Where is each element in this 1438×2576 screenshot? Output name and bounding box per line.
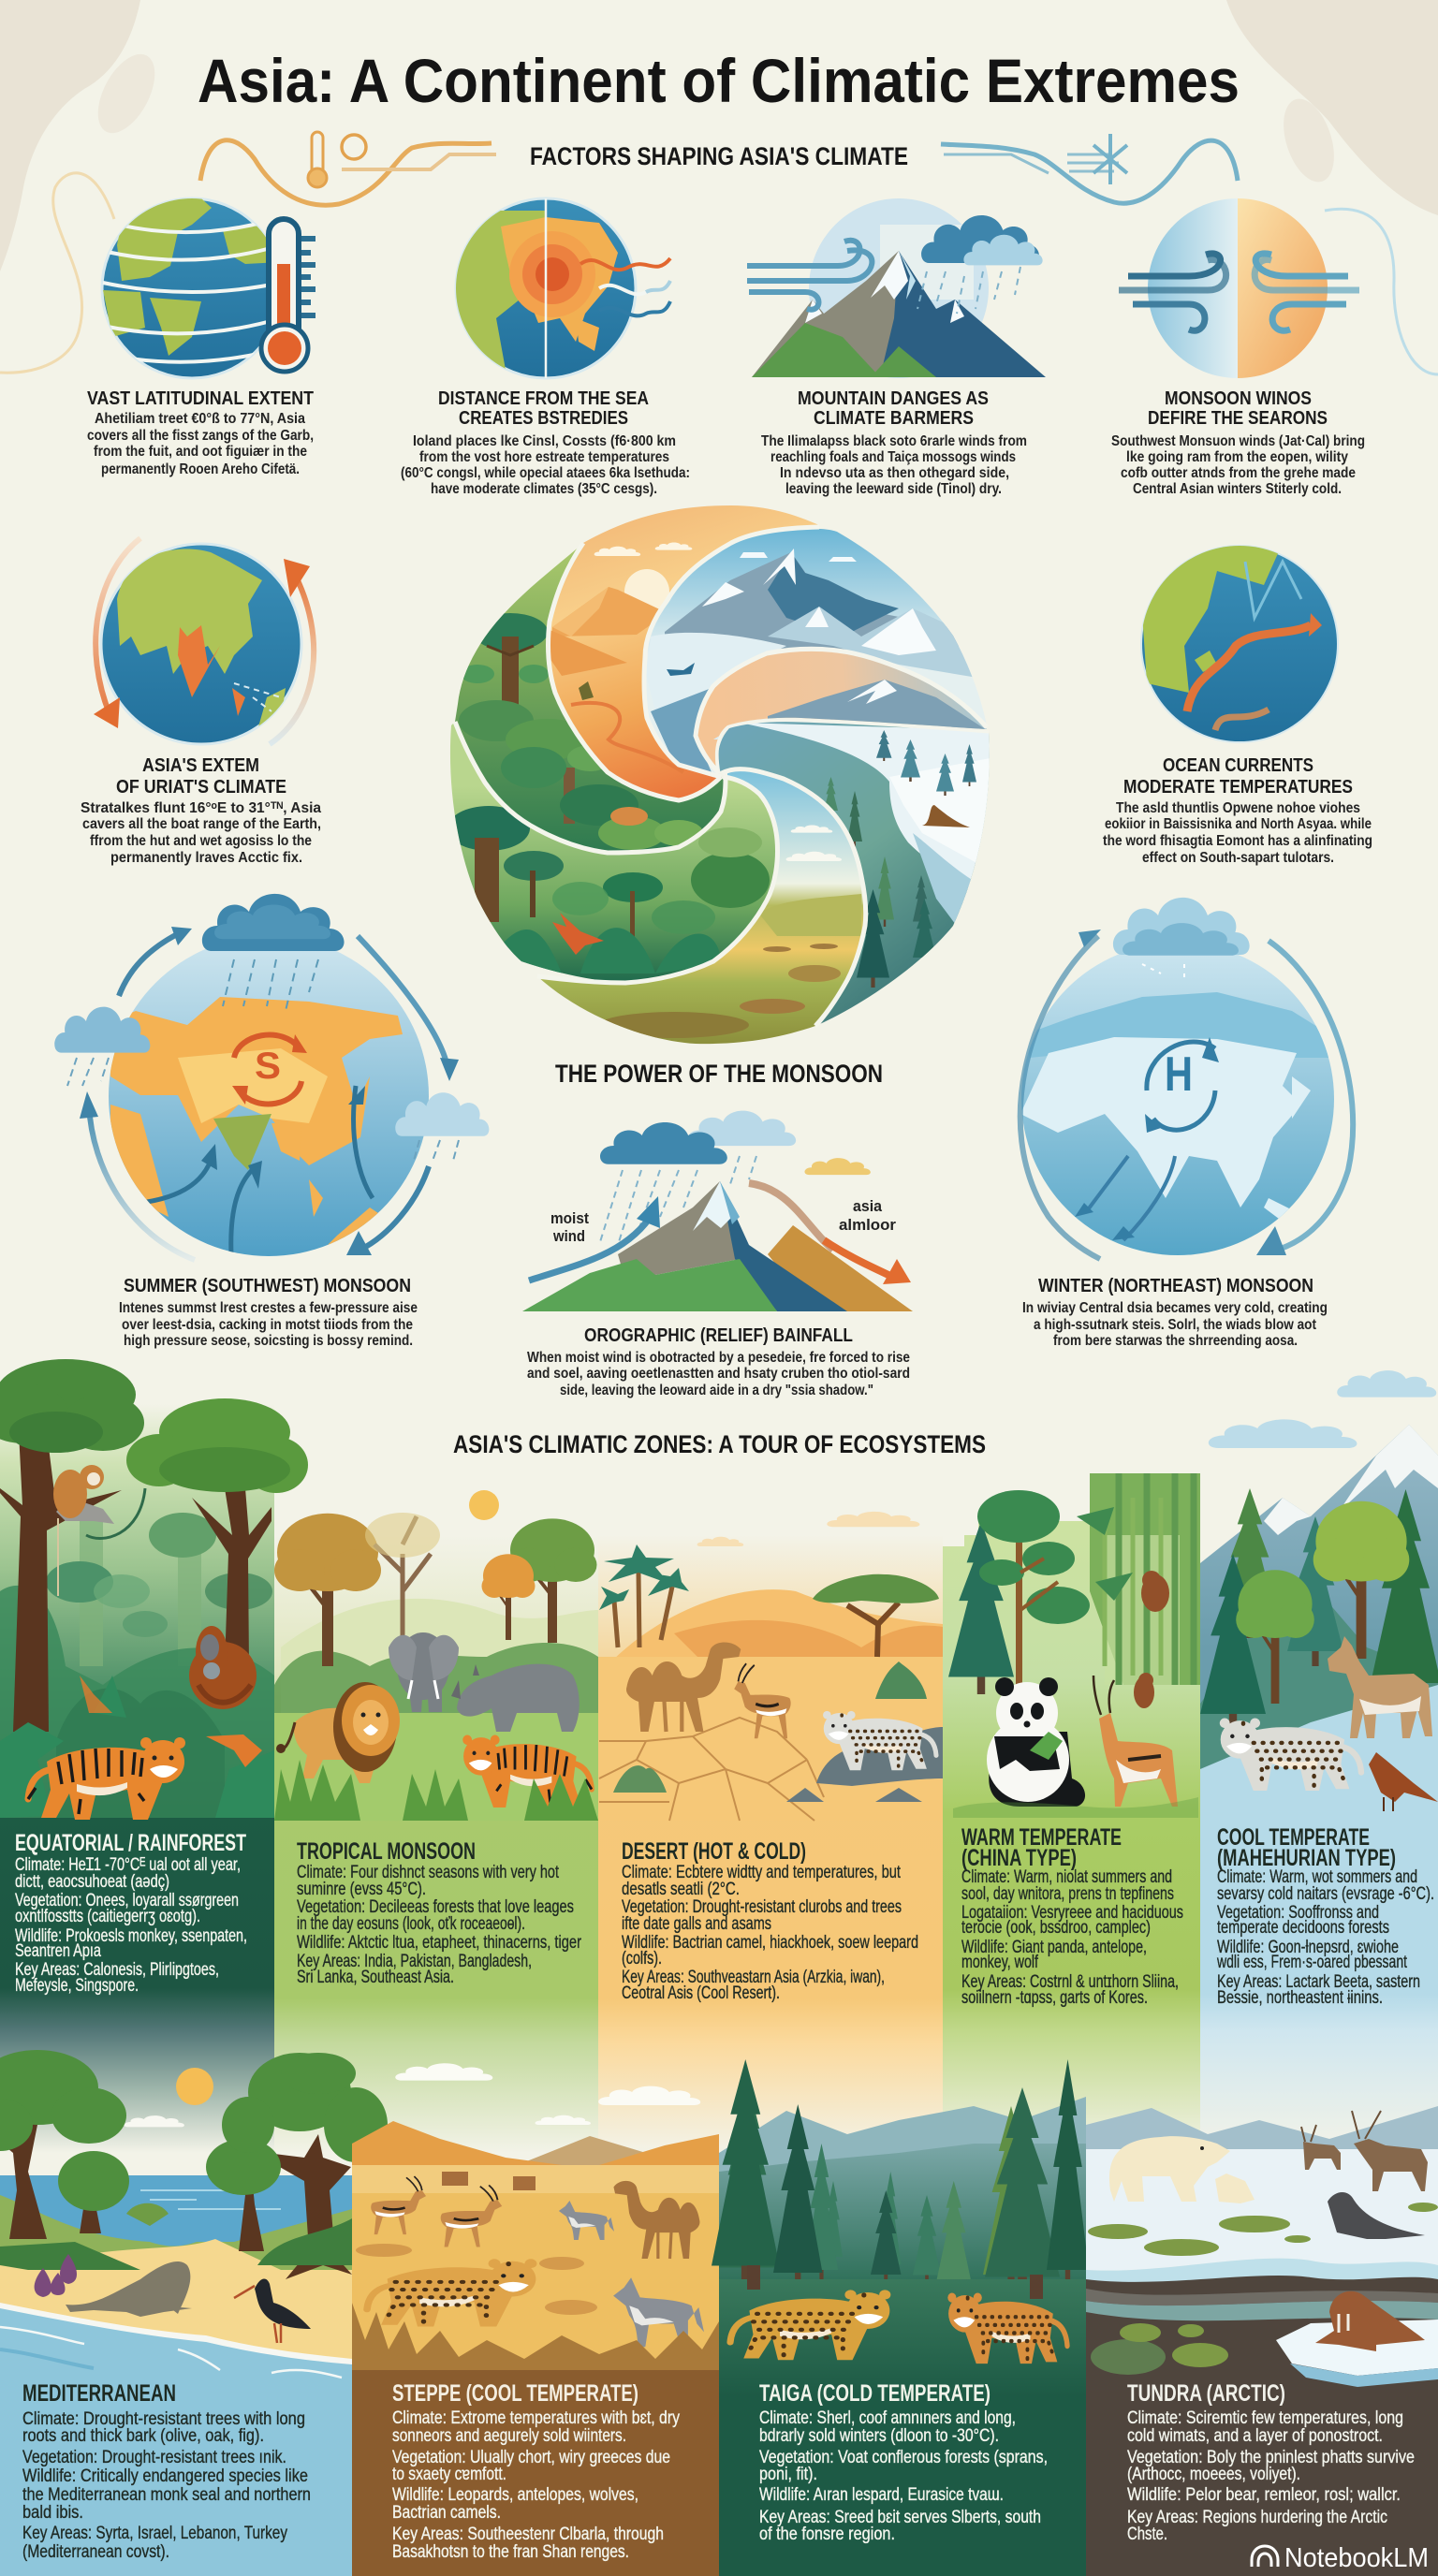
cracked ground xyxy=(599,1718,824,1821)
zone text: tropical monsoon xyxy=(297,1838,582,1987)
zone text xyxy=(392,2380,680,2562)
text block: The Ilimalapss black soto 6rarle winds from xyxy=(761,433,1027,449)
text block: high pressure seose, soicsting is bossy remind. xyxy=(124,1333,413,1349)
heading: OCEAN CURRENTS xyxy=(1163,755,1313,776)
panel: steppe xyxy=(352,2063,719,2576)
text block: The asld thuntlis Opwene nohoe viohes xyxy=(1116,800,1360,816)
zone text: Climate: Extrome temperatures with bɛt, dry xyxy=(392,2408,680,2428)
zone text: cool temperate: COOL TEMPERATE xyxy=(1217,1824,1370,1851)
heading: factors shaping climate: FACTORS SHAPING ASIA'S CLIMATE xyxy=(530,142,908,170)
zone text: desert: Key Areas: Southveastarn Asia (Arzkia, iwan), xyxy=(622,1968,885,1987)
zone text: equatorial rainforest: dictt, eaocsuhoeat (aədç) xyxy=(15,1872,169,1892)
zone text: equatorial rainforest: Seantren Apıa xyxy=(15,1941,101,1961)
text block: leaving the leeward side (Tinol) dry. xyxy=(785,481,1002,497)
heading: OROGRAPHIC (RELIEF) BAINFALL xyxy=(584,1325,853,1346)
zone text: desert: Vegetation: Drought-resistant clurobs and trees xyxy=(622,1897,902,1917)
zone text: equatorial rainforest: Vegetation: Onees, loyarall ssørgreen xyxy=(15,1891,239,1910)
tree canopy right xyxy=(126,1398,308,1493)
zone text: desert: Ceotral Asis (Cool Resert). xyxy=(622,1983,780,2003)
water xyxy=(0,2303,352,2368)
sky and grassland segment xyxy=(534,763,871,1048)
label: dry descent xyxy=(839,1197,896,1234)
heading: WINTER (NORTHEAST) MONSOON xyxy=(1038,1276,1313,1296)
letter S on summer globe: S xyxy=(255,1046,281,1087)
white swirl dividers xyxy=(455,527,989,1026)
panel: desert background xyxy=(598,1512,943,2153)
text block: cavers all the boat range of the Earth, xyxy=(82,816,321,832)
zone text: tropical monsoon: Sri Lanka, Southeast Asia. xyxy=(297,1968,454,1987)
text block xyxy=(1111,433,1365,497)
zone text: warm temperate: terocie (ook, bssdroo, camplec) xyxy=(961,1918,1151,1938)
heading: CLIMATE BARMERS xyxy=(814,408,974,429)
animal: orangutan xyxy=(189,1626,257,1709)
heading: CREATES BSTREDIES xyxy=(459,408,628,429)
panel: taiga xyxy=(712,2059,1089,2576)
animal: kiang xyxy=(1328,1636,1432,1738)
icon: globe and thermometer xyxy=(102,198,315,378)
zone text: bdrarly sold winters (dloon to -30°C). xyxy=(759,2426,999,2446)
text block: Intenes summst lrest crestes a few-pressure aise xyxy=(119,1300,418,1316)
scene: steppe xyxy=(352,2063,719,2373)
zone text: Bactrian camels. xyxy=(392,2503,501,2523)
zone text xyxy=(22,2380,311,2562)
label: moist wind: wind xyxy=(552,1227,585,1245)
moss patches xyxy=(1088,2203,1438,2375)
lower jungle segment xyxy=(448,721,785,988)
heading: power of the monsoon: THE POWER OF THE MONSOON xyxy=(555,1060,883,1088)
zone text: Climate: Drought-resistant trees with long xyxy=(22,2409,305,2429)
text block: and soel, aaving oeetlenastten and hsaty cruben tho otiol-sard xyxy=(527,1366,910,1382)
icon: figs xyxy=(35,2254,77,2297)
text block: When moist wind is obotracted by a pesedeie, fre forced to rise xyxy=(527,1350,910,1366)
icon: mountain with cloud and wind xyxy=(747,198,1046,378)
text block: Stratalkes flunt 16°ᵒE to 31°ᵀᴺ, Asia xyxy=(81,800,321,816)
text block: eokiior in Baissisnika and North Asyaa. while xyxy=(1105,816,1372,832)
zone text: TUNDRA (ARCTIC) xyxy=(1127,2380,1285,2407)
diagram: winter monsoon globe: H xyxy=(1165,1047,1193,1102)
panel: distance from the sea xyxy=(401,198,690,497)
panel: vast latitudinal extent xyxy=(87,198,315,477)
label: dry descent: asia xyxy=(853,1197,883,1215)
text block xyxy=(87,411,314,477)
zone text: Basakhotsn to the fran Shan renges. xyxy=(392,2542,629,2562)
panel: equatorial background xyxy=(0,1359,308,2153)
zone text: warm temperate: sool, day wnitora, prens tn tɐpfinens xyxy=(961,1884,1174,1904)
text background xyxy=(352,2370,719,2576)
panel: cool temperate background xyxy=(1200,1425,1438,2153)
animal: seal xyxy=(1328,2192,1425,2239)
zone text: desert xyxy=(622,1838,918,2003)
text block: the word fhisagtia Eomont has a alinfinating xyxy=(1103,833,1372,849)
text block xyxy=(1022,1300,1328,1349)
snowy forest segment xyxy=(712,721,992,1034)
zone text: cool temperate xyxy=(1216,1824,1434,2008)
zone text: STEPPE (COOL TEMPERATE) xyxy=(392,2380,638,2407)
panel: tropical monsoon background xyxy=(274,1490,598,2153)
zone text: equatorial rainforest: Wildlife: Prokoesls monkey, ssenpaten, xyxy=(15,1926,247,1946)
zone text: warm temperate: Wildlife: Giant panda, antelope, xyxy=(961,1938,1147,1957)
heading xyxy=(1123,755,1353,798)
heading: MOUNTAIN DANGES AS xyxy=(798,388,989,409)
icon: acacia tree xyxy=(813,1574,939,1657)
panel: monsoon winds define the seasons xyxy=(1111,197,1365,497)
panel: mediterranean xyxy=(0,2050,388,2576)
text block: have moderate climates (35°C cesgs). xyxy=(431,481,657,497)
text block: lke going ram from the eopen, wility xyxy=(1126,449,1348,465)
text block xyxy=(401,433,690,497)
animal: reindeer xyxy=(1301,2111,1428,2191)
zone text: of the fonsre region. xyxy=(759,2525,895,2544)
scene: tundra xyxy=(1086,2106,1438,2576)
text block: from the vost hore estreate temperatures xyxy=(419,449,669,465)
icon: sun xyxy=(469,1490,499,1520)
heading: DEFIRE THE SEARONS xyxy=(1148,408,1328,429)
zone text: cool temperate: Vegetation: Sooffronss and xyxy=(1217,1903,1379,1923)
zone text: cold wimats, and a layer of ponostroct. xyxy=(1127,2426,1383,2446)
title: Asia: A Continent of Climatic Extremes xyxy=(198,46,1240,115)
text block: In ndevso uta as then othegard side, xyxy=(780,465,1009,481)
text block: ffrom the hut and wet agosiss lo the xyxy=(90,833,312,849)
animal: proboscis monkey xyxy=(53,1465,114,1596)
zone text: equatorial rainforest: Key Areas: Calonesis, Plirlipgtoes, xyxy=(15,1960,219,1980)
zone text: equatorial rainforest xyxy=(15,1830,247,1996)
zone text: desert: DESERT (HOT & COLD) xyxy=(622,1838,806,1865)
zone text: tropical monsoon: suminre (evss 45°C). xyxy=(297,1880,426,1899)
zone text: to sxaety cɐmfott. xyxy=(392,2465,506,2484)
zone text: warm temperate xyxy=(961,1824,1183,2008)
scene: tropical monsoon xyxy=(274,1490,598,1821)
zone text: equatorial rainforest: Climate: HeꞮ1 -70°Cᴱ ual oot all year, xyxy=(15,1855,241,1875)
heading: DISTANCE FROM THE SEA xyxy=(438,388,649,409)
heading: SUMMER (SOUTHWEST) MONSOON xyxy=(124,1276,411,1296)
animal: lion xyxy=(276,1682,400,1783)
zone text: warm temperate: Climate: Warm, niolat summers and xyxy=(961,1867,1172,1887)
zone text: tropical monsoon: Wildlife: Aktctic ltua, etapheet, thinacerns, tiger xyxy=(297,1933,582,1953)
heading: VAST LATITUDINAL EXTENT xyxy=(87,388,314,409)
text block: (60°C congsl, while opecial ataees 6ka lsethuda: xyxy=(401,465,690,481)
zone text: equatorial rainforest: oxntlfosstts (caitiegerrʒ oɛotg). xyxy=(15,1907,200,1926)
text block: side, leaving the leoward aide in a dry "ssia shadow." xyxy=(560,1383,873,1398)
diagram: summer monsoon globe xyxy=(54,894,489,1260)
icon: globe with orange arrows xyxy=(94,538,314,744)
central swirl illustration of climate zones xyxy=(448,501,992,1048)
decorative side curves xyxy=(0,173,1438,374)
text block xyxy=(1103,800,1372,866)
zone text: warm temperate: monkey, wolf xyxy=(961,1953,1039,1972)
heading xyxy=(438,388,649,429)
diagram: winter monsoon globe xyxy=(1020,898,1353,1259)
text block xyxy=(119,1300,418,1349)
heading xyxy=(1148,388,1328,429)
zone text: bald ibis. xyxy=(22,2503,83,2523)
zone text: tropical monsoon: in the day eosuns (look, oťk roceaeoɵl). xyxy=(297,1914,525,1934)
zone text: tropical monsoon: Climate: Four dishnct seasons with very hot xyxy=(297,1863,560,1882)
zone text: roots and thick bark (olive, oak, fig). xyxy=(22,2426,264,2446)
rocks xyxy=(786,1727,943,1802)
panel: ocean currents xyxy=(1103,543,1372,866)
animal: polar bear xyxy=(1109,2136,1230,2202)
decorative clouds upper right xyxy=(1209,1370,1436,1448)
upper jungle segment xyxy=(455,549,723,850)
zone text: equatorial rainforest: EQUATORIAL / RAINFOREST xyxy=(15,1830,246,1856)
zone text: (Mediterranean covst). xyxy=(22,2542,169,2562)
text block: from bere starwas the shrreending aosa. xyxy=(1053,1333,1298,1349)
text block: over leest-dsia, cacking in motst tiiods from the xyxy=(122,1317,413,1333)
text block: permanently lraves Acctic fix. xyxy=(110,850,302,866)
zone text: warm temperate: WARM TEMPERATE xyxy=(961,1824,1122,1851)
zone text: Vegetation: Ulually chort, wiry greeces due xyxy=(392,2448,670,2467)
zone text: desert: desatls seatli (2°C. xyxy=(622,1880,740,1899)
zone text: tropical monsoon: Vegetation: Decileeas forests that love leages xyxy=(297,1897,574,1917)
zone text: the Mediterranean monk seal and northern xyxy=(22,2485,311,2505)
icon: monkeys xyxy=(1134,1571,1169,1708)
zone text: desert: Wildlife: Bactrian camel, hiackhoek, soew leepard xyxy=(622,1933,918,1953)
animal: panda xyxy=(987,1677,1085,1807)
icon: globe with ocean currents xyxy=(1137,543,1338,742)
panel: warm temperate background xyxy=(943,1473,1200,2153)
text block: cofb outter atnds from the grehe made xyxy=(1121,465,1356,481)
tree group xyxy=(0,2050,388,2279)
zone text: Key Areas: Southeestenr Clbarla, through xyxy=(392,2525,664,2544)
zone text: Chste. xyxy=(1127,2525,1167,2544)
text block: Ioland places lke Cinsl, Cossts (f6·800 km xyxy=(413,433,676,449)
text block: from the fuit, and oot figuiær in the xyxy=(94,444,307,460)
desert segment xyxy=(543,501,824,810)
zone text: desert: Climate: Ecbtere widtty and temperatures, but xyxy=(622,1863,902,1882)
heading xyxy=(116,755,286,798)
icon: globe with heat rings xyxy=(449,198,670,378)
animal: antelopes xyxy=(371,2172,536,2247)
animal: rhino xyxy=(451,1664,580,1732)
zone text: sonneors and aegurely sold wiinters. xyxy=(392,2426,626,2446)
peach sky segment xyxy=(698,651,987,766)
heading: OF URIAT'S CLIMATE xyxy=(116,777,286,798)
panel: mountain ranges as climate barriers xyxy=(747,198,1046,497)
scene: warm temperate xyxy=(948,1473,1200,1818)
animal: gazelle xyxy=(1093,1676,1178,1807)
zone text: equatorial rainforest: Mefeysle, Singspore. xyxy=(15,1976,139,1996)
zone text: cool temperate: Bessie, northeastent ɨinins. xyxy=(1217,1988,1383,2008)
animal: monk seal xyxy=(66,2261,192,2317)
panel: tundra xyxy=(1086,2106,1438,2576)
diagram: orographic mountain xyxy=(522,1111,913,1311)
zone text: cool temperate: temperate decidoons forests xyxy=(1217,1918,1389,1938)
zone text: tropical monsoon: TROPICAL MONSOON xyxy=(297,1838,476,1865)
zone text: Key Areas: Syrta, Israel, Lebanon, Turkey xyxy=(22,2524,287,2543)
scene: taiga xyxy=(712,2059,1089,2576)
zone text xyxy=(759,2380,1048,2544)
text block: Ahetiliam treet €0°ß to 77°N, Asia xyxy=(95,411,305,427)
heading: MONSOON WINOS xyxy=(1165,388,1312,409)
icon: cold wind with snowflake xyxy=(941,134,1238,203)
panel: Asia's extent of climate xyxy=(81,538,321,866)
zone text: Key Areas: Sreed bɛit serves Slberts, south xyxy=(759,2508,1041,2527)
scene: mediterranean xyxy=(0,2050,388,2576)
panel: summer monsoon xyxy=(54,894,489,1349)
text block: Central Asian winters Stiterly cold. xyxy=(1133,481,1342,497)
zone text xyxy=(1127,2380,1415,2544)
zone text: Wildlife: Pelor bear, remleor, rosl; wallcr. xyxy=(1127,2485,1401,2505)
panel: orographic rainfall xyxy=(522,1111,913,1398)
zone text: desert: (colfs). xyxy=(622,1949,662,1969)
snowy mountains segment xyxy=(637,524,992,777)
zone text: poni, fit). xyxy=(759,2465,817,2484)
zone text: warm temperate: Logataiion: Vesryreee and haciduous xyxy=(961,1903,1183,1923)
heading: MODERATE TEMPERATURES xyxy=(1123,777,1353,798)
zone text: warm temperate: (CHINA TYPE) xyxy=(961,1845,1077,1871)
zone text: warm temperate: Key Areas: Costrnl & untɪhorn Sliina, xyxy=(961,1972,1179,1992)
text block: reachling foals and Taiça mossogs winds xyxy=(770,449,1016,465)
text block xyxy=(527,1350,910,1398)
panel: winter monsoon xyxy=(1020,898,1353,1349)
label: dry descent: almloor xyxy=(839,1216,896,1234)
background corner blobs xyxy=(0,0,1438,271)
zone text: (Arthocc, moeees, voliyet). xyxy=(1127,2465,1300,2484)
tree canopy left xyxy=(0,1359,144,1453)
icon: split globe with winds xyxy=(1119,197,1359,380)
animal: elephant xyxy=(389,1632,459,1712)
text block xyxy=(761,433,1027,497)
text block xyxy=(81,800,321,866)
animal: northern bald ibis xyxy=(234,2279,311,2343)
logo: NotebookLM: NotebookLM xyxy=(1284,2543,1429,2573)
text block: a high-ssutnark steis. Solrl, the wiads blow aot xyxy=(1034,1317,1317,1333)
heading xyxy=(798,388,989,429)
text block: permanently Rooen Areho Cifetä. xyxy=(101,461,300,477)
zone text: Wildlife: Leopards, antelopes, wolves, xyxy=(392,2485,638,2505)
text block: Southwest Monsuon winds (Jat·Cal) bring xyxy=(1111,433,1365,449)
icon: palm trees xyxy=(599,1544,689,1647)
text block: effect on South-sapart tulotars. xyxy=(1142,850,1334,866)
text block: In wiviay Central dsia becames very cold, creating xyxy=(1022,1300,1328,1316)
heading: ASIA'S EXTEM xyxy=(142,755,259,776)
zone text: Wildlife: Critically endangered species like xyxy=(22,2466,308,2486)
zone text: Vegetation: Voat conflerous forests (sprans, xyxy=(759,2448,1048,2467)
zone text: MEDITERRANEAN xyxy=(22,2380,176,2407)
zone text: warm temperate: soiilnern -tɑpss, garts of Kores. xyxy=(961,1988,1148,2008)
scene: rainforest xyxy=(0,1359,308,1820)
animal: walrus xyxy=(1315,2291,1425,2351)
zone text: Climate: Sherl, coof amnıners and long, xyxy=(759,2408,1016,2428)
zone text: tropical monsoon: Key Areas: India, Pakistan, Bangladesh, xyxy=(297,1952,532,1971)
icon: heat wave with thermometer xyxy=(200,132,496,205)
text block: covers all the fisst zangs of the Garb, xyxy=(87,428,314,444)
zone text: TAIGA (COLD TEMPERATE) xyxy=(759,2380,990,2407)
zone text: Vegetation: Drought-resistant trees ınik. xyxy=(22,2448,286,2467)
zone text: Key Areas: Regions hurdering the Arctic xyxy=(1127,2508,1387,2527)
label: moist wind: moist xyxy=(550,1209,589,1227)
zone text: desert: ifte date galls and asams xyxy=(622,1914,771,1934)
ice floe xyxy=(1276,2320,1438,2376)
label: moist wind xyxy=(550,1209,589,1245)
scene: desert xyxy=(598,1512,943,1821)
zone text: Wildlife: Aıran lespard, Eurasice tvaɯ. xyxy=(759,2485,1004,2505)
heading: Asia's climatic zones: ASIA'S CLIMATIC ZONES: A TOUR OF ECOSYSTEMS xyxy=(453,1430,986,1458)
scene: cool temperate xyxy=(1200,1425,1438,1825)
